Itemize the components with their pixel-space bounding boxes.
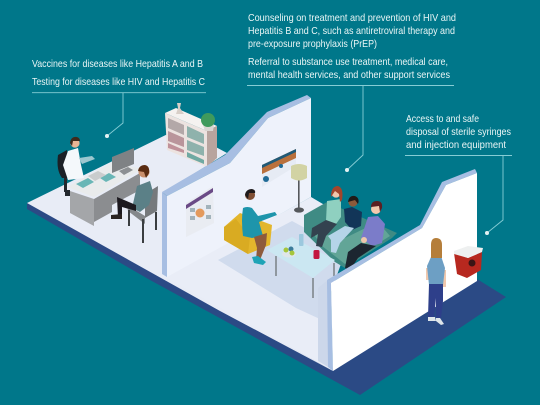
left room floor (27, 128, 333, 371)
yellow armchair (224, 213, 272, 254)
floor shade beside front wall (318, 280, 328, 367)
vase (176, 103, 184, 114)
doctor (58, 137, 95, 196)
seated woman: navy top (328, 196, 362, 253)
callout: counseling and referral (247, 13, 456, 172)
water bottle (299, 234, 304, 246)
wall poster: services (186, 186, 214, 237)
office chair (58, 150, 70, 196)
counselor in yellow chair (224, 189, 277, 265)
seated man: purple top (345, 201, 385, 270)
sofa (304, 202, 397, 268)
standing woman (426, 238, 446, 325)
bookshelf (165, 103, 217, 167)
wall poster: banner (262, 149, 296, 187)
plant (201, 113, 215, 131)
callout: counseling and referral: pre-exposure prophylaxis (PrEP) (248, 39, 377, 50)
callout: counseling and referral: Counseling on treatment and prevention of HIV and (248, 13, 456, 24)
building floor shadow (27, 203, 506, 395)
computer monitor (112, 148, 134, 173)
floor lamp (291, 164, 307, 213)
callout: vaccines and testing: Vaccines for diseases like Hepatitis A and B (32, 59, 203, 70)
callout: vaccines and testing: Testing for diseases like HIV and Hepatitis C (32, 77, 205, 88)
coffee table (267, 234, 335, 298)
office desk (67, 148, 142, 226)
patient chair (127, 186, 158, 243)
callout: syringes: Access to and safe (406, 114, 479, 125)
sharps disposal container (454, 246, 483, 278)
lounge rug (218, 221, 346, 320)
callout: counseling and referral: Hepatitis B and C, such as antiretroviral therapy and (248, 26, 455, 37)
callout: syringes: and injection equipment (406, 140, 506, 151)
callout: counseling and referral: mental health services, and other support services (248, 70, 450, 81)
callout: syringes (405, 114, 512, 235)
seated woman: red hair (311, 186, 342, 247)
red cup (314, 250, 320, 259)
callout: syringes: disposal of sterile syringes (406, 127, 511, 138)
back wall (162, 95, 311, 277)
callout: vaccines and testing (32, 59, 206, 138)
patient (111, 165, 158, 243)
fruit bowl (282, 246, 296, 258)
front wall (327, 169, 477, 371)
callout: counseling and referral: Referral to substance use treatment, medical care, (248, 57, 448, 68)
lounge floor (165, 197, 345, 371)
